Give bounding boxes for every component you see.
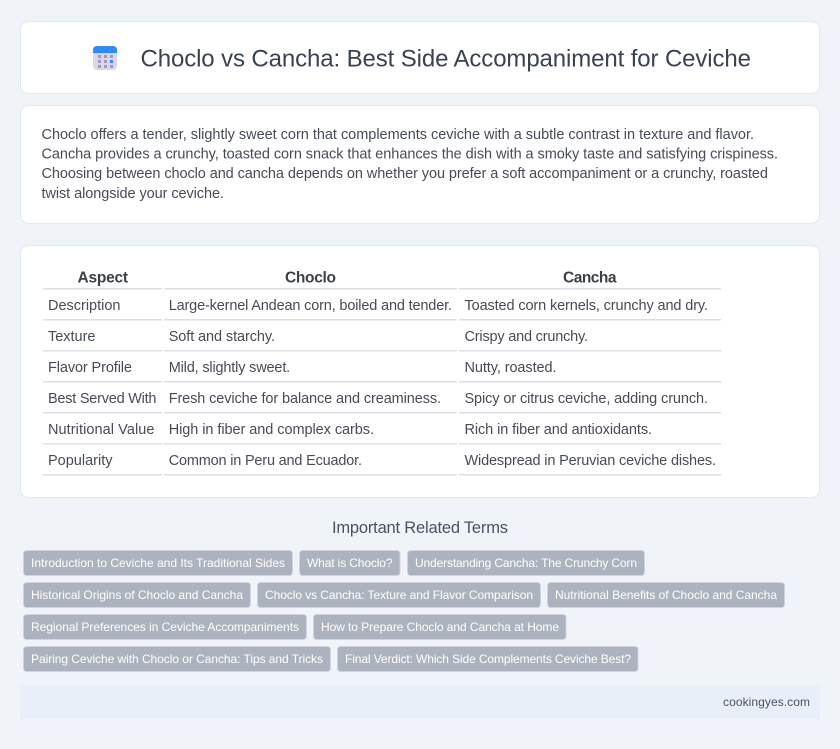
tag: Historical Origins of Choclo and Cancha (31, 588, 243, 602)
tag: Final Verdict: Which Side Complements Ceviche Best? (345, 652, 631, 666)
row: texture: Soft and starchy. (169, 329, 275, 345)
row: texture: Crispy and crunchy. (464, 329, 588, 345)
row: description: Description (48, 298, 120, 314)
row: flavor profile: Nutty, roasted. (464, 360, 556, 376)
tag (258, 582, 540, 608)
footer (20, 685, 820, 719)
tag: How to Prepare Choclo and Cancha at Home (321, 620, 559, 634)
tag: Regional Preferences in Ceviche Accompaniments (31, 620, 299, 634)
footer credit: cookingyes.com (723, 695, 810, 709)
panel: header (20, 22, 820, 94)
tag: What is Choclo? (307, 556, 393, 570)
table header: Aspect (78, 270, 128, 287)
tag (24, 550, 292, 576)
row: popularity: Common in Peru and Ecuador. (169, 453, 362, 469)
row: nutritional value (48, 422, 652, 438)
row: best served with (48, 391, 708, 407)
tag: Choclo vs Cancha: Texture and Flavor Comparison (265, 588, 533, 602)
tag (300, 550, 400, 576)
row: flavor profile: Flavor Profile (48, 360, 132, 376)
row: nutritional value: Rich in fiber and antioxidants. (464, 422, 652, 438)
row: popularity: Widespread in Peruvian ceviche dishes. (464, 453, 716, 469)
tag: Nutritional Benefits of Choclo and Cancha (555, 588, 777, 602)
panel: introduction (20, 106, 820, 224)
row: description (48, 298, 708, 314)
row: flavor profile: Mild, slightly sweet. (169, 360, 290, 376)
heading: important related terms: Important Related Terms (332, 519, 508, 537)
row: flavor profile (48, 360, 556, 376)
text block: introduction: Choosing between choclo and cancha depends on whether you prefer a soft accompaniment or a crunchy, roasted (42, 166, 768, 182)
row: description: Large-kernel Andean corn, boiled and tender. (169, 298, 452, 314)
tag (408, 550, 644, 576)
row: best served with: Best Served With (48, 391, 156, 407)
row: best served with: Fresh ceviche for balance and creaminess. (169, 391, 441, 407)
row: popularity: Popularity (48, 453, 113, 469)
table header: Choclo (285, 270, 336, 287)
text block: introduction: Cancha provides a crunchy, toasted corn snack that enhances the dish with a smoky taste and satisfying crispiness. (42, 147, 778, 163)
tag (314, 614, 566, 640)
row: nutritional value: Nutritional Value (48, 422, 154, 438)
tag (338, 646, 638, 672)
tag list: related terms (24, 550, 784, 672)
tag (24, 614, 306, 640)
row: best served with: Spicy or citrus ceviche, adding crunch. (464, 391, 708, 407)
title: Choclo vs Cancha: Best Side Accompaniment for Ceviche (140, 46, 751, 72)
table header (78, 270, 617, 287)
row: nutritional value: High in fiber and complex carbs. (169, 422, 374, 438)
text block: introduction (42, 127, 778, 202)
tag: Understanding Cancha: The Crunchy Corn (415, 556, 637, 570)
row: popularity (48, 453, 716, 469)
row: texture (48, 329, 588, 345)
icon: calendar (93, 46, 117, 70)
text block: introduction: twist alongside your ceviche. (42, 186, 224, 202)
tag (24, 646, 330, 672)
table header: Cancha (563, 270, 617, 287)
tag (548, 582, 784, 608)
tag: Introduction to Ceviche and Its Traditional Sides (31, 556, 285, 570)
tag (24, 582, 250, 608)
text block: introduction: Choclo offers a tender, slightly sweet corn that complements ceviche with a subtle contrast in texture and flavor. (42, 127, 754, 143)
row: description: Toasted corn kernels, crunchy and dry. (464, 298, 708, 314)
row: texture: Texture (48, 329, 96, 345)
panel: comparison table (20, 246, 820, 498)
tag: Pairing Ceviche with Choclo or Cancha: Tips and Tricks (31, 652, 323, 666)
